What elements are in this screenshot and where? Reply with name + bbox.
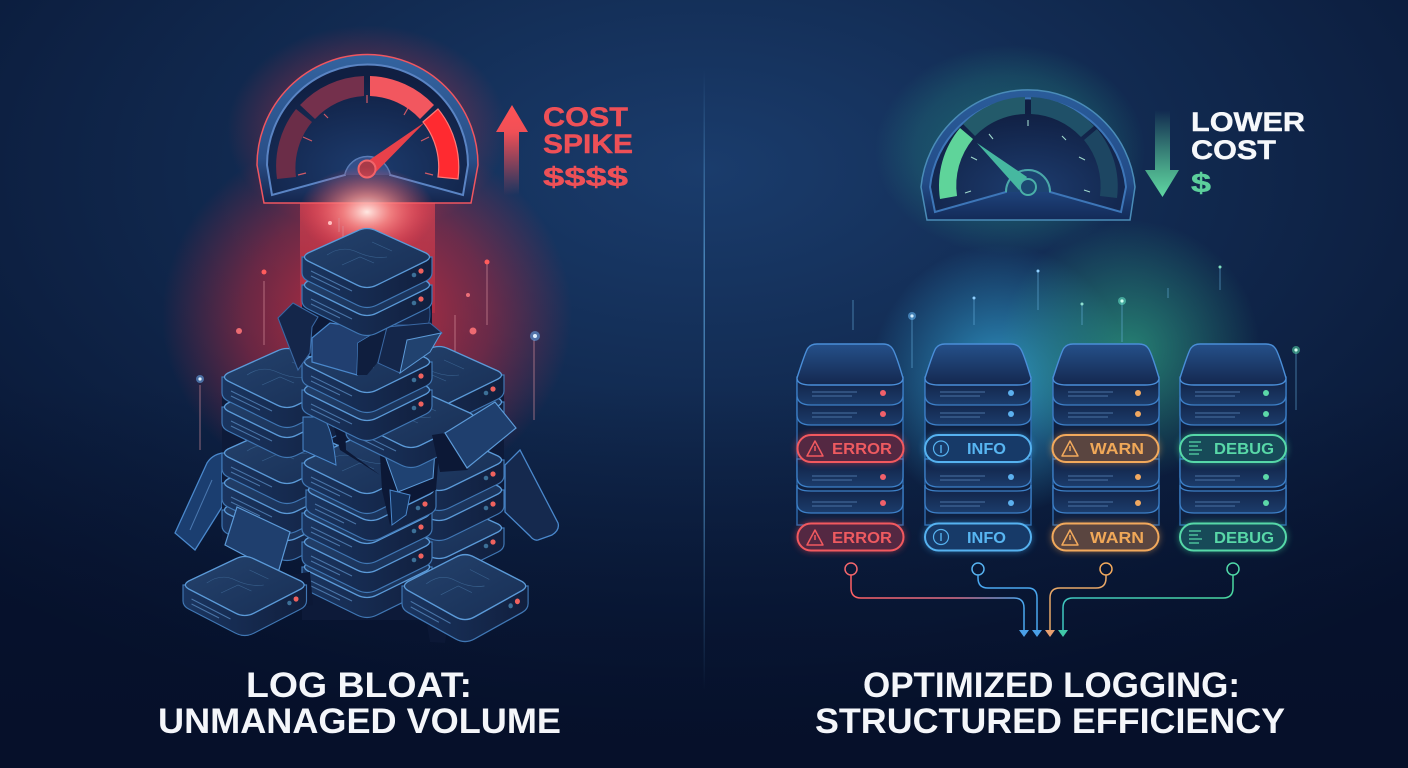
server column: warn (1052, 344, 1159, 550)
lower cost text: COST (1191, 135, 1277, 165)
right stack (374, 346, 504, 578)
fallen flat servers (183, 555, 528, 642)
lower cost text: $ (1191, 168, 1211, 198)
top server (302, 228, 432, 336)
info tag lower (925, 524, 1031, 550)
info tag upper: INFO (967, 441, 1006, 458)
connector: debug (1058, 563, 1239, 637)
error tag upper: ERROR (832, 441, 892, 458)
warn tag upper (1052, 435, 1158, 462)
server column: error (797, 344, 904, 550)
cost gauge high (227, 25, 507, 258)
debug tag upper: DEBUG (1214, 441, 1274, 458)
server pile (175, 228, 558, 643)
title: log bloat: UNMANAGED VOLUME (158, 702, 561, 741)
cost spike arrow (496, 105, 528, 195)
center divider (704, 70, 705, 690)
fallen left slab (175, 453, 222, 550)
lower cost text (1191, 107, 1305, 198)
title: log bloat: LOG BLOAT: (246, 666, 472, 705)
title: optimized logging (815, 666, 1285, 741)
warn tag lower (1052, 524, 1158, 550)
connector: info (972, 563, 1042, 637)
cost spike text: COST (543, 102, 629, 132)
info tag lower: INFO (967, 530, 1006, 547)
debug tag lower: DEBUG (1214, 530, 1274, 547)
left stack (222, 348, 352, 560)
info tag upper (925, 435, 1031, 462)
fallen right slab (505, 450, 558, 540)
title: log bloat (158, 666, 561, 741)
connector: error (845, 563, 1029, 637)
lower cost text: LOWER (1191, 107, 1305, 137)
warn tag lower: WARN (1090, 530, 1144, 547)
particles (853, 266, 1300, 410)
broken fragments (225, 300, 516, 643)
panel: log bloat (158, 25, 633, 741)
title: optimized logging: OPTIMIZED LOGGING: (863, 666, 1240, 705)
server column: info (925, 344, 1031, 550)
server column: debug (1180, 344, 1286, 550)
error tag lower: ERROR (832, 530, 892, 547)
cost spike text: SPIKE (543, 129, 633, 159)
center stack (302, 334, 476, 618)
panel: optimized logging (797, 45, 1305, 741)
pile backing (222, 300, 504, 620)
cost spike text: $$$$ (543, 162, 628, 192)
error tag upper (798, 435, 904, 462)
debug tag lower (1180, 524, 1286, 550)
cost spike text (543, 102, 633, 192)
warn tag upper: WARN (1090, 441, 1144, 458)
connector: warn (1045, 563, 1112, 637)
error tag lower (798, 524, 904, 550)
cost gauge low (875, 45, 1145, 255)
particles (196, 218, 540, 450)
lower cost arrow (1145, 110, 1179, 197)
debug tag upper (1180, 435, 1286, 462)
title: optimized logging: STRUCTURED EFFICIENCY (815, 702, 1285, 741)
red light beam (300, 203, 435, 313)
connector lines (845, 563, 1239, 637)
